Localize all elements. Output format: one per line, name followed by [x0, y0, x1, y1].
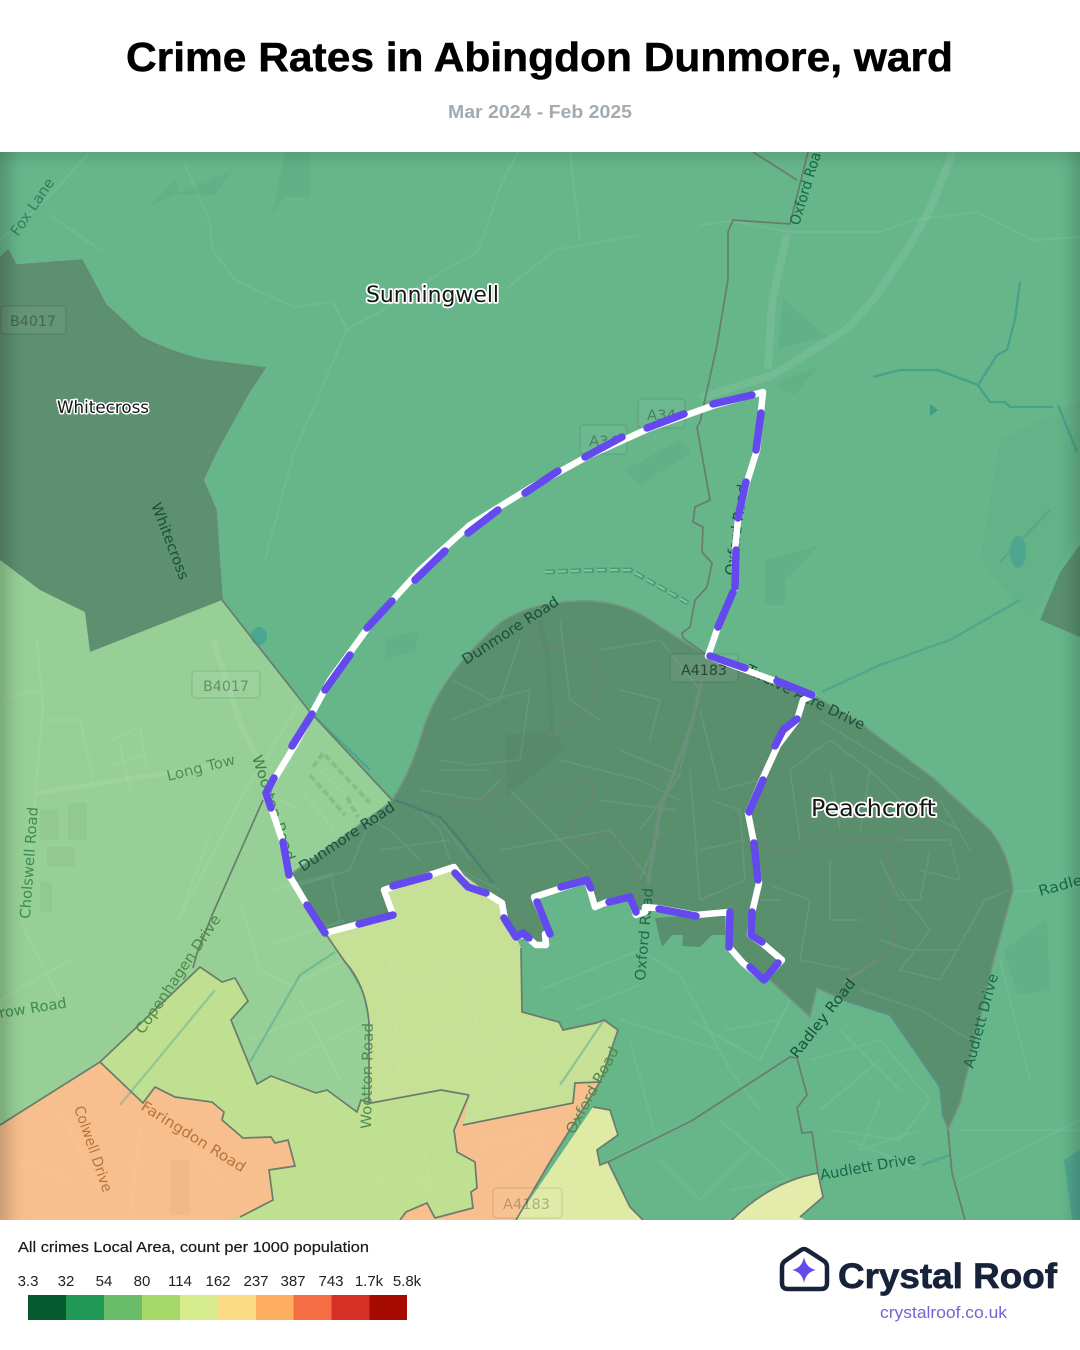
- area: orange ward west: [0, 1062, 295, 1220]
- legend scale labels: 1.7k: [355, 1273, 384, 1290]
- area labels: [57, 283, 936, 822]
- legend scale labels: 54: [96, 1273, 112, 1290]
- area: pale yellow ward south-east: [732, 1173, 823, 1220]
- estate blocks dashed: [310, 753, 370, 817]
- road labels: Wootton Road: [248, 753, 297, 863]
- legend scale labels: 162: [205, 1273, 231, 1290]
- area labels: Whitecross: [57, 398, 149, 418]
- logo url: crystalroof.co.uk: [880, 1304, 1008, 1322]
- ward outline: purple dashes: [266, 395, 812, 980]
- road labels: Oxford Road: [563, 1045, 623, 1137]
- logo: [782, 1249, 1057, 1322]
- road labels: Cholswell Road: [18, 806, 42, 919]
- area: Peachcroft dark ward: [290, 601, 1013, 1130]
- road shields: B4017: [10, 314, 56, 330]
- legend scale labels: 32: [58, 1273, 74, 1290]
- area: orange ward centre: [400, 1082, 600, 1220]
- road labels: Whitecross: [147, 501, 191, 582]
- road labels: Oxford Road: [723, 483, 752, 577]
- internal ward lines in Peachcroft: [440, 623, 938, 980]
- area: dark block near Oxford Road: [655, 916, 726, 947]
- railway dashed line: [545, 570, 688, 603]
- road shields: A34: [589, 434, 618, 450]
- darker land patches: [40, 152, 1080, 1215]
- title: Crime Rates in Abingdon Dunmore, ward: [126, 34, 953, 80]
- area: pale yellow ward south: [516, 1107, 643, 1220]
- road labels: Copenhagen Drive: [133, 912, 225, 1037]
- legend scale labels: 114: [168, 1273, 192, 1290]
- road labels: Dunmore Road: [296, 799, 398, 875]
- area labels: Sunningwell: [366, 283, 499, 308]
- legend colour ramp: [28, 1295, 407, 1320]
- road shields: A4183: [503, 1197, 550, 1213]
- legend scale labels: 80: [134, 1273, 150, 1290]
- road labels: Twelve Acre Drive: [742, 662, 867, 734]
- icon: house with star: [782, 1249, 827, 1289]
- road labels: row Road: [0, 996, 68, 1022]
- legend title: All crimes Local Area, count per 1000 population: [18, 1240, 369, 1256]
- area: Long Tow light green ward: [0, 560, 392, 1125]
- logo wordmark: Crystal Roof: [838, 1257, 1057, 1296]
- ward boundary lines: [0, 152, 965, 1220]
- water courses: [120, 282, 1080, 1220]
- road labels: Fox Lane: [8, 176, 58, 239]
- legend scale labels: 743: [318, 1273, 344, 1290]
- road labels: Dunmore Road: [459, 594, 562, 668]
- road shields: A4183: [681, 663, 727, 679]
- area: pale yellow-green ward: [325, 867, 618, 1125]
- legend scale labels: 387: [280, 1273, 306, 1290]
- area: small dark ward east edge: [1040, 545, 1080, 637]
- road shields: A34: [647, 408, 676, 424]
- legend scale labels: 3.3: [18, 1273, 38, 1290]
- legend scale labels: 5.8k: [393, 1273, 422, 1290]
- road labels: Audlett Drive: [819, 1151, 917, 1184]
- road labels: Faringdon Road: [138, 1099, 248, 1176]
- road labels: Oxford Road: [633, 887, 657, 981]
- subtitle: date range: Mar 2024 - Feb 2025: [448, 102, 632, 122]
- legend scale labels: 237: [243, 1273, 269, 1290]
- road shields: [1, 306, 738, 1218]
- road labels: Wootton Road: [359, 1023, 377, 1129]
- roads network: [0, 152, 1080, 1220]
- road labels: Long Tow: [165, 752, 237, 785]
- area labels: Peachcroft: [811, 796, 936, 822]
- road labels: [0, 142, 1080, 1194]
- road shields: B4017: [203, 679, 249, 695]
- ward outline: white base: [266, 392, 813, 980]
- road labels: Audlett Drive: [961, 972, 1002, 1070]
- road labels: Colwell Drive: [70, 1104, 115, 1194]
- legend: [18, 1240, 422, 1320]
- road labels: Radle: [1037, 873, 1080, 900]
- road labels: Radley Road: [788, 976, 859, 1061]
- road labels: Oxford Road: [788, 142, 827, 227]
- legend scale labels: [18, 1273, 422, 1290]
- area: Whitecross dark ward: [0, 250, 265, 652]
- area: pale green wards south-west: [100, 967, 477, 1220]
